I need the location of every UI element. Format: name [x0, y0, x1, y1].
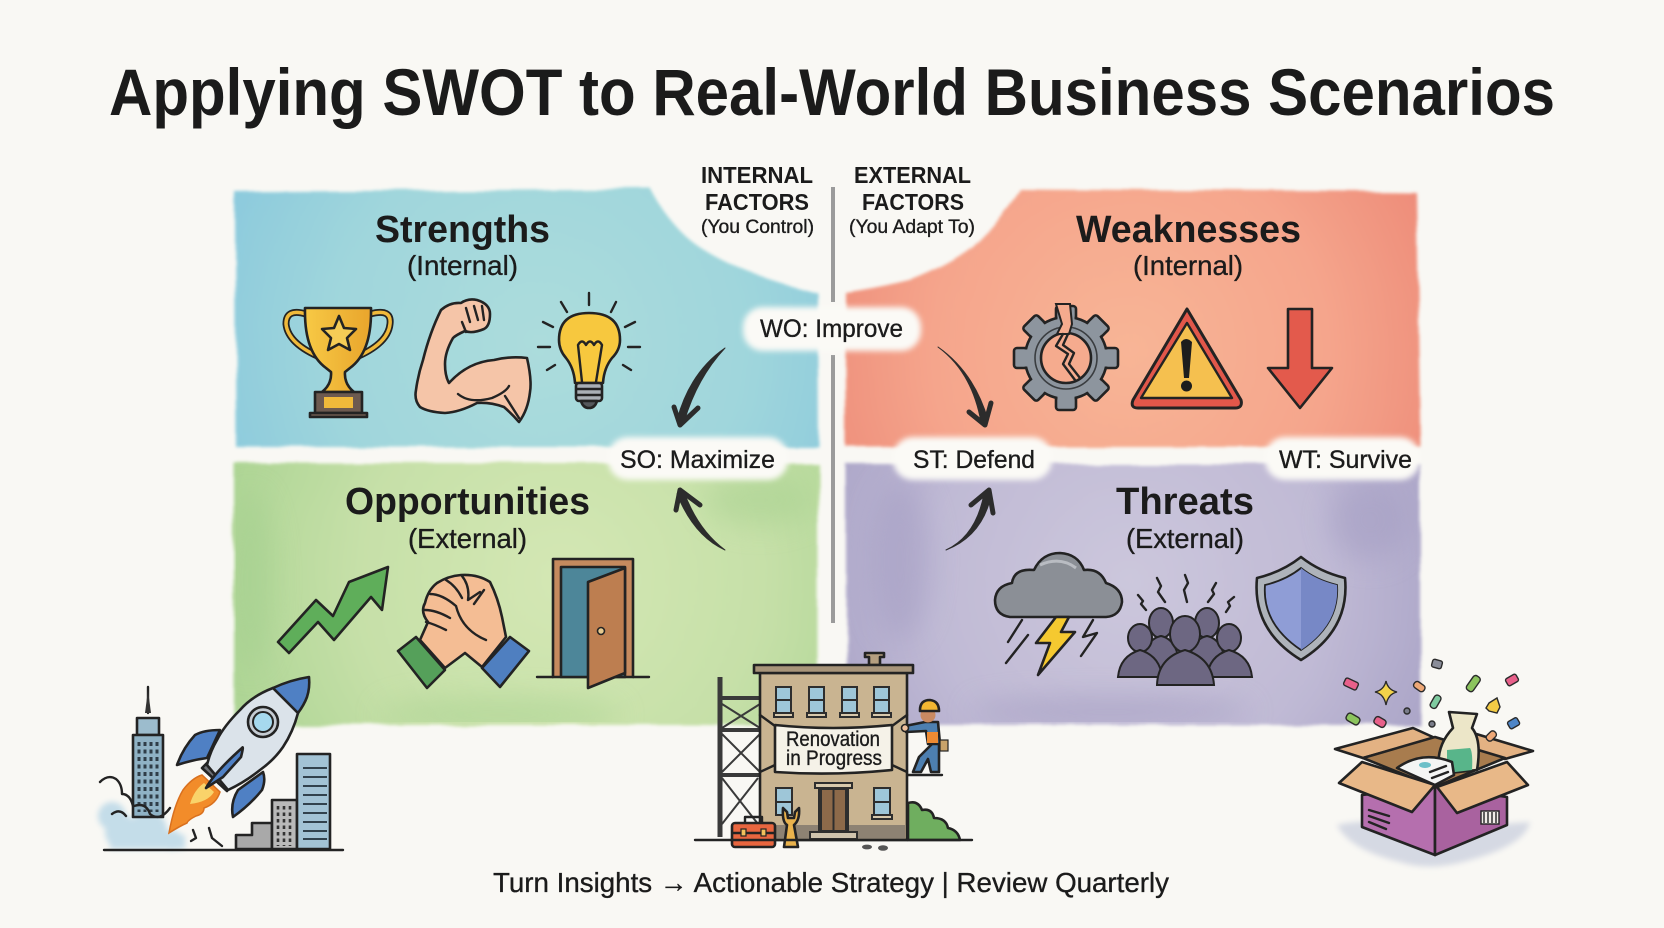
building wall: [760, 673, 907, 840]
icon: down arrow: [1268, 309, 1332, 408]
front door: [810, 783, 857, 839]
ground line: [695, 839, 972, 841]
ground line: [104, 849, 343, 851]
arrow: WO to ST: [938, 347, 991, 425]
pill: WO Improve: [743, 307, 921, 351]
heading: threats: Threats: [1116, 481, 1254, 523]
heading: strengths: Strengths: [375, 209, 550, 251]
label: external factors: FACTORS: [862, 189, 964, 215]
heading: weaknesses: Weaknesses: [1076, 209, 1301, 251]
icon: light bulb: [538, 293, 640, 408]
chimney: [865, 653, 884, 665]
lower windows: [776, 788, 892, 819]
bottle: [1439, 712, 1479, 774]
rocket body: [177, 677, 309, 817]
worker: [902, 700, 948, 775]
subheading: internal: (Internal): [407, 250, 518, 281]
upper windows: [774, 687, 891, 717]
arrow: threats to ST: [946, 490, 993, 550]
blue watercolor wash: [235, 189, 819, 447]
banner: Renovation: [786, 728, 880, 751]
pill: WO Improve: WO: Improve: [760, 315, 903, 343]
icon: shield: [1257, 557, 1345, 660]
red watercolor wash: [846, 189, 1420, 447]
icon: storm cloud: [995, 553, 1122, 675]
arrow: opportunities to SO: [676, 490, 725, 550]
label: internal factors: (You Control): [701, 217, 814, 238]
title: Applying SWOT to Real-World Business Scenarios: [109, 55, 1555, 129]
heading: opportunities: Opportunities: [345, 481, 590, 523]
pill: WT Survive: [1265, 437, 1420, 480]
purple watercolor wash: [846, 464, 1420, 725]
central divider: [831, 187, 835, 623]
illustration: product box with confetti: [1335, 659, 1533, 867]
green wash shading: [236, 482, 800, 722]
label: external factors: EXTERNAL: [854, 162, 971, 188]
confetti: [1343, 659, 1520, 742]
illustration: rocket launch: [98, 677, 343, 850]
panel: strengths: [235, 189, 819, 447]
panel: opportunities: [228, 463, 818, 733]
right buildings: [236, 754, 330, 849]
footer text: Turn Insights → Actionable Strategy | Review Quarterly: [493, 867, 1169, 898]
icon: warning triangle: [1132, 309, 1241, 408]
purple wash shading: [880, 492, 1392, 722]
box interior: [1363, 737, 1505, 787]
banner: in Progress: [786, 747, 882, 770]
banner: [760, 715, 907, 774]
front flaps: [1339, 762, 1528, 813]
building base: [762, 825, 905, 839]
left tower: [133, 687, 163, 817]
pebbles: [862, 845, 888, 851]
icon: broken gear: [1014, 304, 1118, 410]
panel: threats: [846, 464, 1420, 726]
paper: [1397, 757, 1454, 785]
label: external factors: [849, 162, 975, 238]
smoke outline: [100, 777, 170, 817]
back flaps: [1335, 728, 1533, 759]
icon: trophy: [286, 308, 390, 417]
icon: handshake: [398, 575, 529, 688]
green watercolor wash: [234, 463, 818, 725]
flame: [169, 775, 220, 833]
illustration: building renovation: [695, 653, 972, 851]
icon: crowd of people: [1118, 575, 1252, 685]
subheading: external: (External): [408, 523, 527, 554]
scaffold: [720, 677, 760, 837]
label: internal factors: [701, 162, 814, 238]
icon: flexed arm: [416, 299, 531, 422]
label: external factors: (You Adapt To): [849, 217, 975, 238]
pill: ST Defend: ST: Defend: [913, 446, 1035, 474]
panel: weaknesses: [846, 189, 1420, 447]
subheading: external: (External): [1126, 523, 1244, 554]
pill: WT Survive: WT: Survive: [1279, 446, 1412, 474]
toolbox: [732, 817, 775, 847]
smoke cloud: [98, 802, 185, 850]
label: internal factors: INTERNAL: [701, 162, 813, 188]
arrow: WO to SO: [674, 348, 725, 425]
label: internal factors: FACTORS: [705, 189, 809, 215]
pill: ST Defend: [893, 437, 1052, 480]
icon: growth arrow: [278, 567, 388, 653]
wrench: [783, 808, 799, 847]
box shadow: [1337, 822, 1530, 867]
subheading: internal: (Internal): [1133, 250, 1243, 281]
pill: SO Maximize: [608, 437, 788, 480]
box front faces: [1362, 787, 1507, 855]
icon: open door: [537, 559, 649, 688]
pill: SO Maximize: SO: Maximize: [620, 446, 775, 474]
roof cornice: [754, 665, 913, 673]
bush: [908, 802, 960, 840]
